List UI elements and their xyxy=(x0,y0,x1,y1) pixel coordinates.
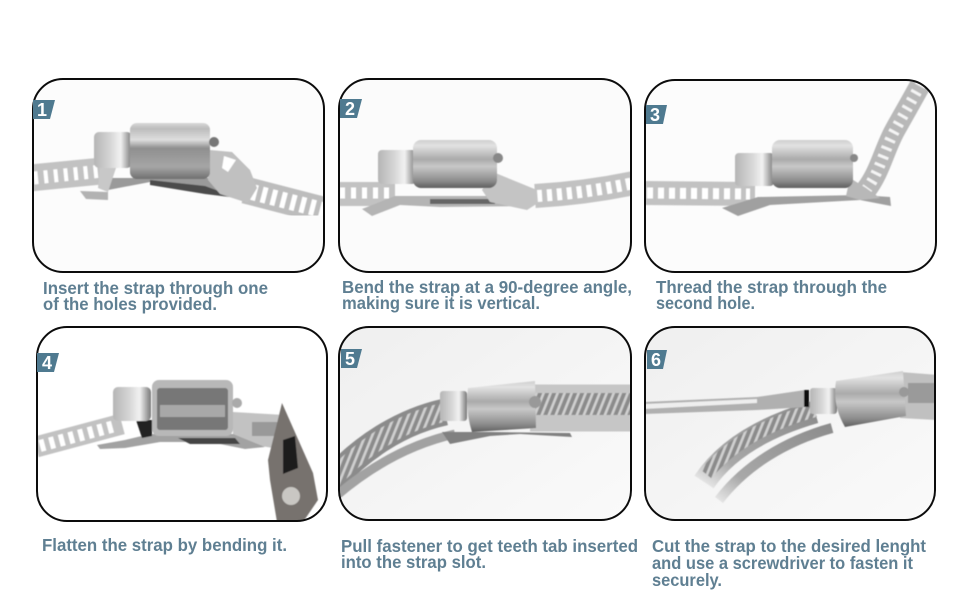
caption: Thread the strap through the xyxy=(656,277,887,297)
step badge xyxy=(341,349,362,369)
caption: making sure it is vertical. xyxy=(342,293,540,313)
photo: cutting strap and screwdriver tightening xyxy=(644,327,938,520)
panel: step 1 xyxy=(30,79,326,314)
caption xyxy=(43,278,268,314)
caption xyxy=(342,277,632,313)
caption: into the strap slot. xyxy=(341,552,486,572)
frame xyxy=(645,80,936,272)
step badge: 2 xyxy=(345,99,355,119)
frame xyxy=(33,79,324,272)
frame xyxy=(645,327,935,520)
step badge xyxy=(37,353,59,373)
caption xyxy=(656,277,887,313)
photo: clamp with strap bent xyxy=(340,140,630,216)
panel: step 5 xyxy=(332,327,638,572)
panel: step 3 xyxy=(642,78,936,313)
caption: Flatten the strap by bending it. xyxy=(42,535,287,555)
step badge: 1 xyxy=(37,100,47,120)
caption: of the holes provided. xyxy=(43,294,217,314)
photo: strap threaded through second hole xyxy=(646,81,929,216)
step badge xyxy=(33,100,55,120)
frame xyxy=(339,79,631,272)
caption: Bend the strap at a 90-degree angle, xyxy=(342,277,632,297)
step badge: 3 xyxy=(650,105,660,125)
caption: and use a screwdriver to fasten it xyxy=(652,553,913,573)
caption: Pull fastener to get teeth tab inserted xyxy=(341,536,638,556)
step badge: 4 xyxy=(42,353,52,373)
caption xyxy=(341,536,638,572)
step badge: 6 xyxy=(651,350,661,370)
photo: clamp with strap inserted xyxy=(34,122,323,216)
caption: second hole. xyxy=(656,293,755,313)
photo: fastener pulled onto strap xyxy=(332,327,634,520)
caption: securely. xyxy=(652,570,722,590)
caption: Cut the strap to the desired lenght xyxy=(652,536,926,556)
frame xyxy=(37,327,327,521)
caption: Insert the strap through one xyxy=(43,278,268,298)
panel: step 4 xyxy=(36,327,327,555)
frame xyxy=(339,327,631,520)
step badge xyxy=(647,350,667,370)
step badge xyxy=(340,99,362,119)
panel: step 2 xyxy=(336,79,634,313)
photo: flattening strap with pliers xyxy=(38,380,319,520)
panel: step 6 xyxy=(644,327,938,590)
step badge: 5 xyxy=(345,349,355,369)
caption xyxy=(652,536,926,590)
step badge xyxy=(646,105,667,125)
